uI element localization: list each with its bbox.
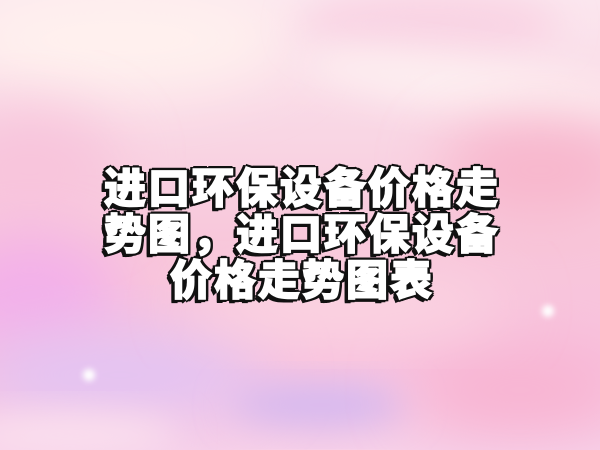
title: 进口环保设备价格走势图，进口环保设备价格走势图表: [104, 155, 500, 308]
